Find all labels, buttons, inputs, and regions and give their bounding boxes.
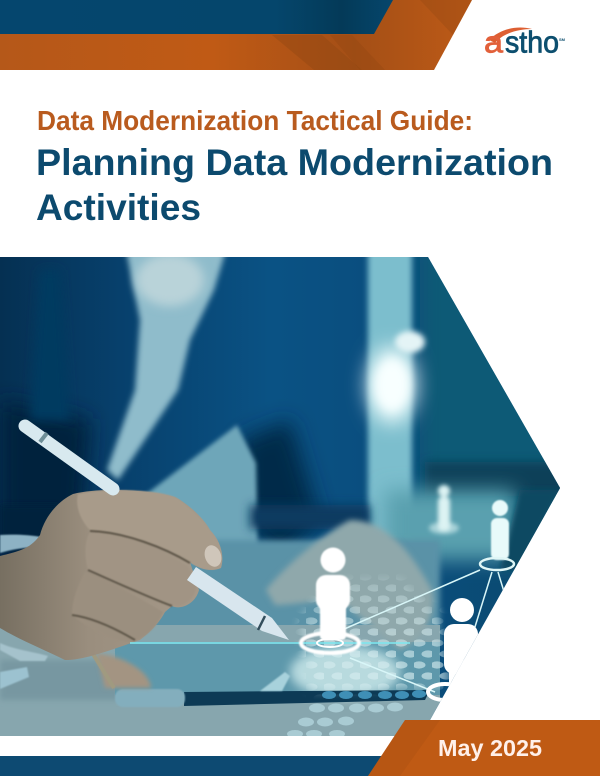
desk mid-ground bbox=[156, 536, 444, 648]
ring: lower right bbox=[428, 684, 462, 700]
person: centre bbox=[316, 548, 350, 640]
desk foreground bbox=[0, 625, 440, 740]
glow line bbox=[130, 642, 410, 644]
blurred second hand bbox=[266, 520, 433, 650]
suit background bbox=[0, 257, 600, 737]
stylus lower bbox=[187, 567, 289, 640]
hand bbox=[0, 490, 224, 660]
left cuff bbox=[0, 535, 42, 553]
light column bbox=[368, 250, 412, 540]
header banner bbox=[0, 0, 472, 70]
subtitle line: Data Modernization Tactical Guide: bbox=[37, 105, 473, 136]
stylus upper bbox=[25, 426, 113, 489]
dark background right bbox=[422, 257, 560, 546]
blue banner band bbox=[0, 0, 393, 34]
lapel shadow bbox=[240, 420, 320, 560]
bottom navy band bbox=[0, 756, 400, 776]
main title: Activities bbox=[36, 186, 201, 228]
person: far back bbox=[429, 485, 459, 534]
logo: astho: SM bbox=[559, 37, 566, 42]
target ring bbox=[301, 633, 359, 653]
main title: Planning Data Modernization bbox=[36, 141, 553, 183]
person: right bbox=[444, 598, 478, 686]
glow bbox=[368, 347, 416, 423]
date: May 2025 bbox=[438, 735, 542, 761]
lower dot rows bbox=[287, 690, 426, 738]
logo: astho: stho bbox=[505, 24, 559, 60]
date banner bbox=[368, 720, 600, 776]
tablet bbox=[115, 642, 440, 695]
lower tablet edge bbox=[184, 690, 430, 706]
ring: back right bbox=[480, 558, 514, 570]
logo: astho: a bbox=[484, 24, 504, 60]
dot field bbox=[296, 578, 449, 697]
orange banner band bbox=[0, 0, 472, 70]
shirt bbox=[107, 250, 226, 480]
title bbox=[36, 105, 553, 228]
network lines bbox=[342, 570, 505, 692]
main title bbox=[36, 141, 553, 228]
sleeve gap bbox=[145, 425, 258, 560]
photo: hand with stylus and network of people bbox=[0, 257, 560, 736]
reflection of fingers and stylus bbox=[96, 653, 151, 688]
person: back right bbox=[491, 500, 509, 560]
